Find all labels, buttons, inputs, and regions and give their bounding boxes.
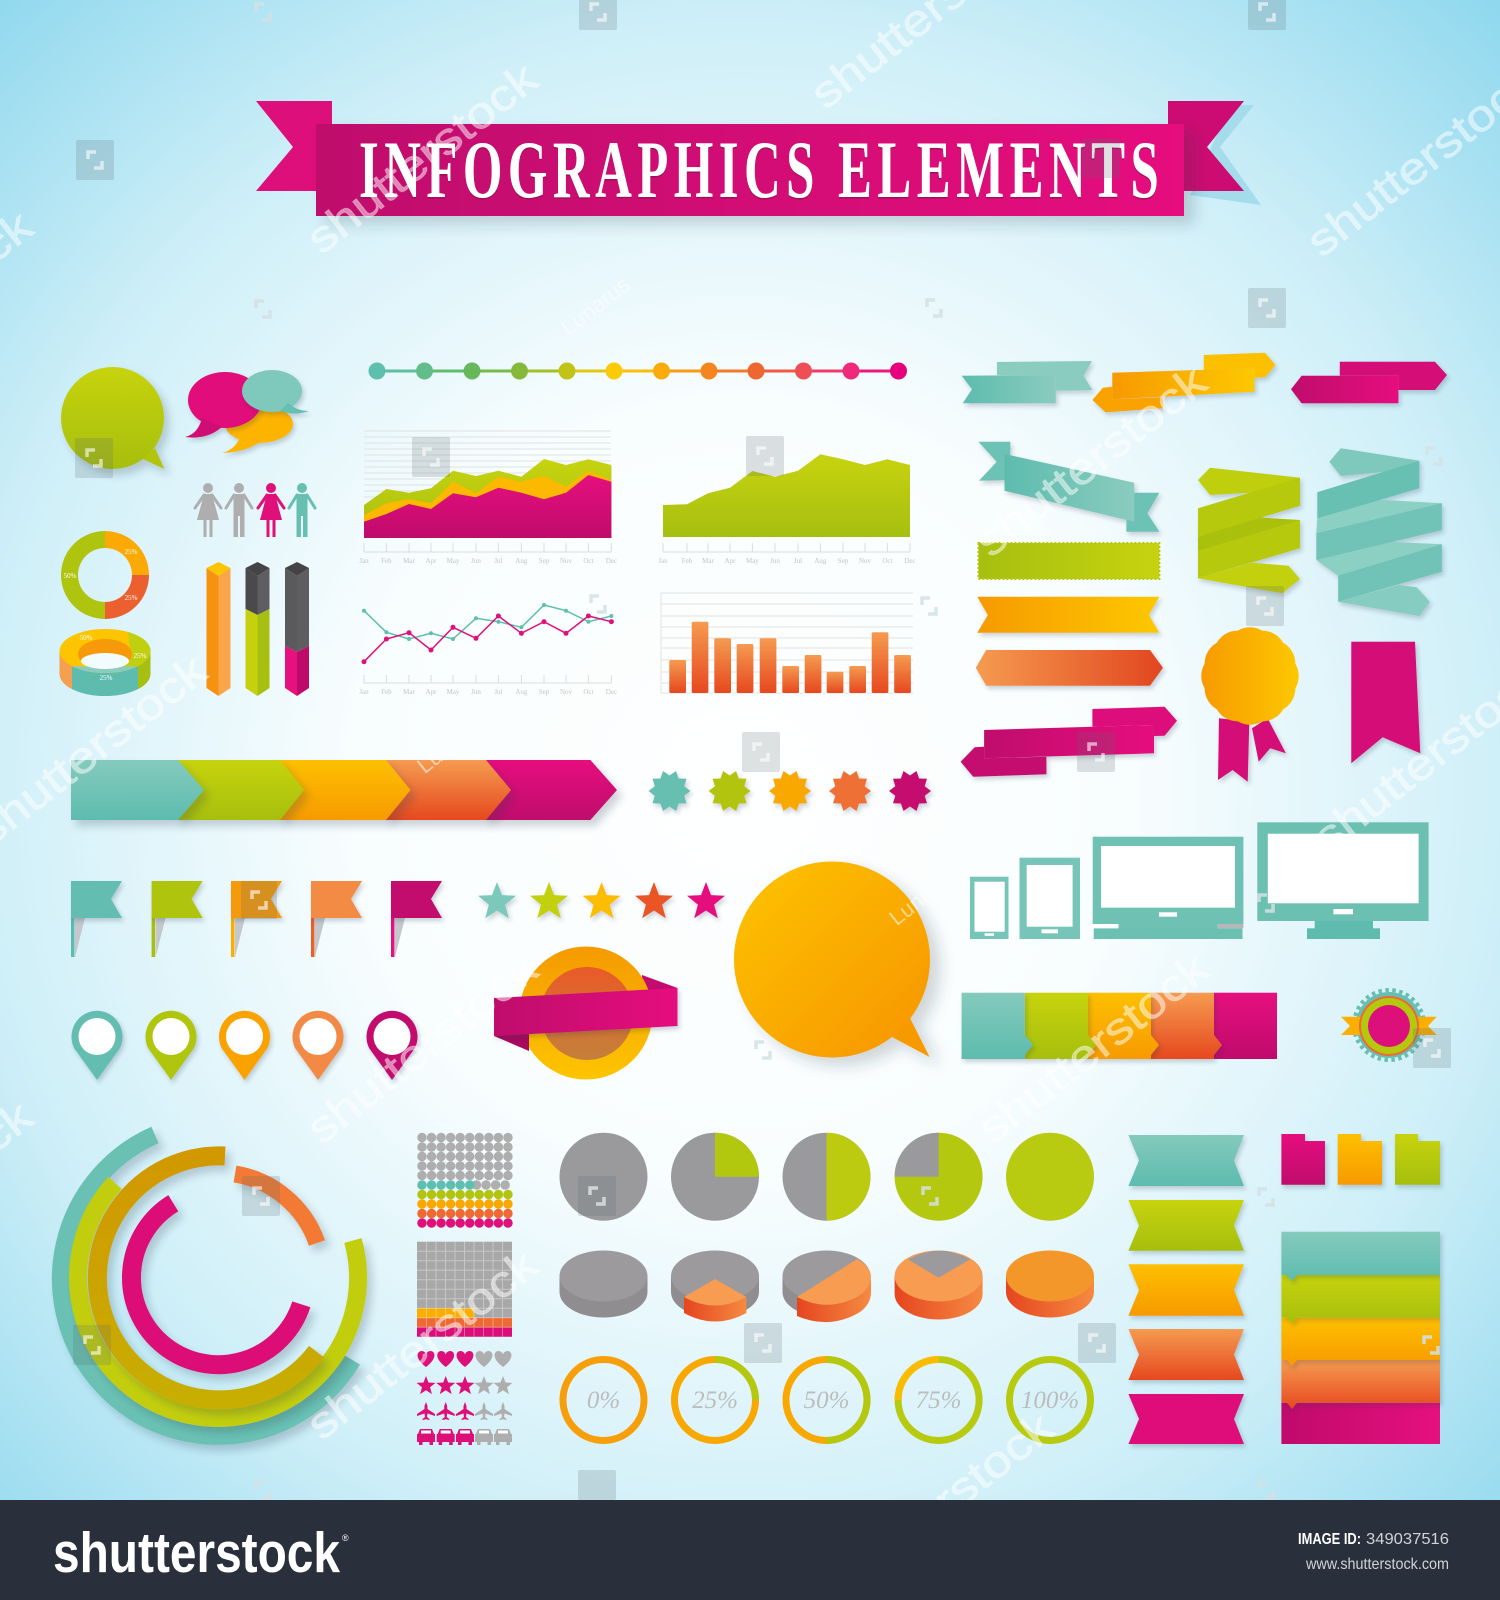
woman magenta bbox=[258, 483, 284, 537]
ring 0 percent bbox=[563, 1360, 644, 1440]
month labels: Dec bbox=[606, 557, 617, 565]
3D bars bbox=[206, 562, 309, 696]
ring 100 percent bbox=[1010, 1360, 1090, 1440]
banner main band bbox=[316, 124, 1184, 216]
banner green bbox=[1128, 1200, 1244, 1251]
small seal badge bbox=[1341, 990, 1437, 1060]
image id number: 349037516 bbox=[1366, 1531, 1449, 1548]
pie 100 percent bbox=[1006, 1133, 1094, 1221]
rating icons: hearts bbox=[418, 1351, 511, 1367]
chevron arrow process bar bbox=[71, 760, 617, 820]
month labels: Feb bbox=[682, 557, 693, 565]
month labels: Nov bbox=[859, 557, 872, 565]
ribbon: green serrated strip bbox=[978, 543, 1159, 579]
axis bbox=[364, 675, 611, 683]
month labels: Aug bbox=[814, 557, 827, 565]
month labels: Jan bbox=[359, 688, 369, 696]
pin magenta bbox=[366, 1011, 418, 1080]
ribbon band bbox=[494, 988, 678, 1036]
3D donut chart: 25% bbox=[100, 674, 113, 682]
flag light orange bbox=[311, 881, 362, 957]
rating icons: planes bbox=[417, 1402, 512, 1420]
devices bbox=[970, 822, 1429, 939]
green area chart bbox=[658, 454, 916, 565]
woman gray bbox=[195, 483, 221, 537]
big orange speech bubble bbox=[734, 862, 930, 1058]
tablet bbox=[1020, 858, 1080, 939]
month labels bbox=[658, 557, 916, 565]
month labels: Mar bbox=[702, 557, 714, 565]
footer url: www.shutterstock.com bbox=[1305, 1556, 1449, 1573]
ribbon: teal zigzag bbox=[1316, 448, 1442, 616]
starburst row bbox=[648, 771, 931, 811]
orange arc bbox=[235, 1174, 317, 1243]
flag magenta bbox=[391, 881, 442, 957]
month labels: Nov bbox=[560, 688, 573, 696]
banner teal bbox=[1128, 1135, 1244, 1186]
footer bar bbox=[0, 1500, 1500, 1600]
month labels: Dec bbox=[606, 688, 617, 696]
banner left tail bbox=[256, 101, 332, 191]
month labels: Aug bbox=[515, 557, 528, 565]
bookmark ribbon bbox=[1351, 642, 1420, 763]
ring 75 percent: 75% bbox=[916, 1387, 962, 1414]
pin orange bbox=[219, 1011, 270, 1080]
rating icons: stars bbox=[416, 1376, 512, 1394]
green arc bbox=[78, 1183, 358, 1418]
flag green bbox=[152, 881, 203, 957]
flag orange bbox=[231, 881, 282, 957]
month labels: Jul bbox=[494, 688, 503, 696]
square grid bbox=[417, 1242, 512, 1337]
month labels: Apr bbox=[426, 688, 437, 696]
man gray bbox=[226, 483, 252, 537]
month labels: Jul bbox=[794, 557, 802, 565]
ribbon: red label bbox=[976, 650, 1163, 686]
month labels: Mar bbox=[403, 688, 415, 696]
donut chart: 50% bbox=[64, 572, 77, 580]
bar magenta bbox=[285, 562, 309, 696]
registered mark: ® bbox=[342, 1533, 349, 1543]
month labels: Apr bbox=[725, 557, 736, 565]
3D pie 25 percent bbox=[671, 1250, 759, 1322]
donut chart: 25% bbox=[125, 548, 138, 556]
stacked area chart bbox=[359, 431, 617, 565]
watermark layer: shutterstock bbox=[966, 356, 1217, 566]
month labels: Apr bbox=[426, 557, 437, 565]
ribbon: teal small bbox=[962, 361, 1092, 403]
ring 100 percent: 100% bbox=[1021, 1387, 1079, 1414]
layer green bbox=[1281, 1275, 1440, 1323]
ring 50 percent: 50% bbox=[804, 1387, 849, 1414]
rating icons: cars bbox=[417, 1429, 512, 1445]
pie 0 percent bbox=[560, 1133, 648, 1221]
month labels: Jan bbox=[359, 557, 369, 565]
star row bbox=[478, 882, 725, 918]
notched banner stack bbox=[1128, 1135, 1244, 1444]
speech bubble: green bbox=[61, 367, 164, 469]
ochre arc bbox=[97, 1156, 317, 1400]
donut chart bbox=[61, 531, 149, 619]
ring 0 percent: 0% bbox=[587, 1387, 620, 1414]
bar orange bbox=[206, 562, 230, 696]
orange bubble bbox=[222, 405, 293, 453]
pie 75 percent bbox=[895, 1133, 983, 1221]
magenta arc bbox=[131, 1203, 301, 1365]
title banner bbox=[256, 101, 1261, 216]
3D pie 0 percent bbox=[560, 1250, 648, 1318]
month labels: Nov bbox=[560, 557, 573, 565]
flag markers bbox=[71, 881, 442, 957]
watermark layer: Lunarus bbox=[884, 862, 962, 930]
teal bubble bbox=[242, 370, 309, 414]
ring 25 percent bbox=[674, 1360, 756, 1440]
title: INFOGRAPHICS ELEMENTS bbox=[359, 124, 1159, 215]
month labels: Sep bbox=[539, 557, 550, 565]
ring 50 percent bbox=[786, 1360, 867, 1440]
concentric arc chart bbox=[61, 1135, 358, 1436]
flag teal bbox=[71, 881, 122, 957]
axis bbox=[364, 543, 611, 552]
month labels: May bbox=[447, 557, 460, 565]
month labels: Sep bbox=[539, 688, 550, 696]
ring 75 percent bbox=[898, 1360, 979, 1440]
axis bbox=[663, 543, 910, 552]
month labels: Jul bbox=[494, 557, 503, 565]
month labels: Feb bbox=[381, 557, 392, 565]
magenta bubble bbox=[185, 372, 262, 438]
folder green bbox=[1395, 1134, 1440, 1185]
laptop bbox=[1093, 837, 1243, 939]
month labels bbox=[359, 557, 617, 565]
footer logo: shutterstock bbox=[53, 1521, 340, 1585]
pin light orange bbox=[292, 1011, 344, 1080]
banner orange bbox=[1128, 1264, 1244, 1316]
line chart bbox=[359, 603, 617, 696]
scalloped seal bbox=[1201, 627, 1299, 725]
3D donut chart bbox=[60, 629, 151, 696]
layered tab panel bbox=[1281, 1232, 1440, 1444]
bar chart bbox=[661, 593, 913, 693]
pin green bbox=[146, 1011, 196, 1080]
banner magenta bbox=[1128, 1394, 1244, 1444]
3D pie row bbox=[560, 1250, 1094, 1322]
circular badge with ribbon bbox=[494, 946, 678, 1080]
folder magenta bbox=[1281, 1134, 1325, 1185]
folder tabs bbox=[1281, 1134, 1440, 1185]
teal arc bbox=[61, 1135, 352, 1436]
month labels: Jun bbox=[770, 557, 780, 565]
3D pie 75 percent bbox=[895, 1250, 983, 1320]
award badge bbox=[1201, 627, 1299, 782]
month labels: Mar bbox=[403, 557, 415, 565]
phone bbox=[970, 877, 1008, 939]
3D pie 50 percent bbox=[782, 1250, 871, 1322]
ring 25 percent: 25% bbox=[692, 1387, 738, 1414]
stepped color bar bbox=[962, 993, 1277, 1059]
month labels: Jun bbox=[471, 688, 481, 696]
month labels: Oct bbox=[882, 557, 893, 565]
map pins bbox=[72, 1011, 418, 1080]
layer teal bbox=[1281, 1232, 1440, 1281]
banner cast shadow bbox=[1190, 105, 1261, 205]
ribbon back folds bbox=[642, 975, 678, 996]
ribbon: magenta folded bbox=[961, 707, 1177, 777]
ribbon: orange small bbox=[1092, 353, 1276, 412]
watermark layer: shutterstock bbox=[297, 943, 548, 1153]
man teal bbox=[289, 483, 315, 537]
month labels bbox=[359, 688, 617, 696]
watermark layer: shutterstock bbox=[297, 1239, 548, 1449]
banner right tail bbox=[1168, 101, 1244, 191]
banner red bbox=[1128, 1329, 1244, 1380]
donut chart: 25% bbox=[125, 594, 138, 602]
ribbon: orange banner bbox=[977, 597, 1159, 633]
month labels: Oct bbox=[583, 557, 594, 565]
watermark layer: shutterstock bbox=[968, 943, 1219, 1153]
3D donut chart: 25% bbox=[134, 652, 147, 660]
folder orange bbox=[1338, 1134, 1382, 1185]
people icons bbox=[195, 483, 315, 537]
layer magenta bbox=[1281, 1403, 1440, 1444]
ribbon: magenta small bbox=[1291, 362, 1447, 403]
speech bubbles: trio bbox=[185, 370, 309, 453]
month labels: Dec bbox=[904, 557, 916, 565]
layer red bbox=[1281, 1360, 1440, 1409]
monitor bbox=[1257, 822, 1429, 939]
pie 25 percent bbox=[671, 1133, 759, 1221]
month labels: Feb bbox=[381, 688, 392, 696]
3D donut chart: 50% bbox=[80, 634, 93, 642]
month labels: Jan bbox=[658, 557, 668, 565]
bar green bbox=[246, 562, 270, 696]
timeline bbox=[368, 362, 907, 380]
dot grid bbox=[422, 1138, 508, 1223]
month labels: May bbox=[746, 557, 759, 565]
layer orange bbox=[1281, 1317, 1440, 1366]
ribbon: green zigzag bbox=[1198, 468, 1300, 593]
watermark layer: Lunarus bbox=[556, 272, 634, 340]
badge discs bbox=[520, 946, 652, 1080]
flat pie row bbox=[560, 1133, 1094, 1221]
pin teal bbox=[72, 1011, 122, 1080]
month labels: Aug bbox=[515, 688, 528, 696]
pie 50 percent bbox=[782, 1133, 871, 1221]
month labels: Jun bbox=[471, 557, 481, 565]
month labels: Sep bbox=[838, 557, 849, 565]
month labels: Oct bbox=[583, 688, 594, 696]
watermark layer: shutterstock bbox=[297, 53, 548, 263]
progress ring row bbox=[563, 1360, 1090, 1440]
3D pie 100 percent bbox=[1006, 1250, 1094, 1318]
month labels: May bbox=[447, 688, 460, 696]
watermark layer: Lunarus bbox=[412, 710, 490, 778]
image id label: IMAGE ID: bbox=[1298, 1531, 1361, 1548]
badge ribbons bbox=[1218, 718, 1286, 782]
ribbon: teal diagonal bbox=[978, 442, 1159, 532]
